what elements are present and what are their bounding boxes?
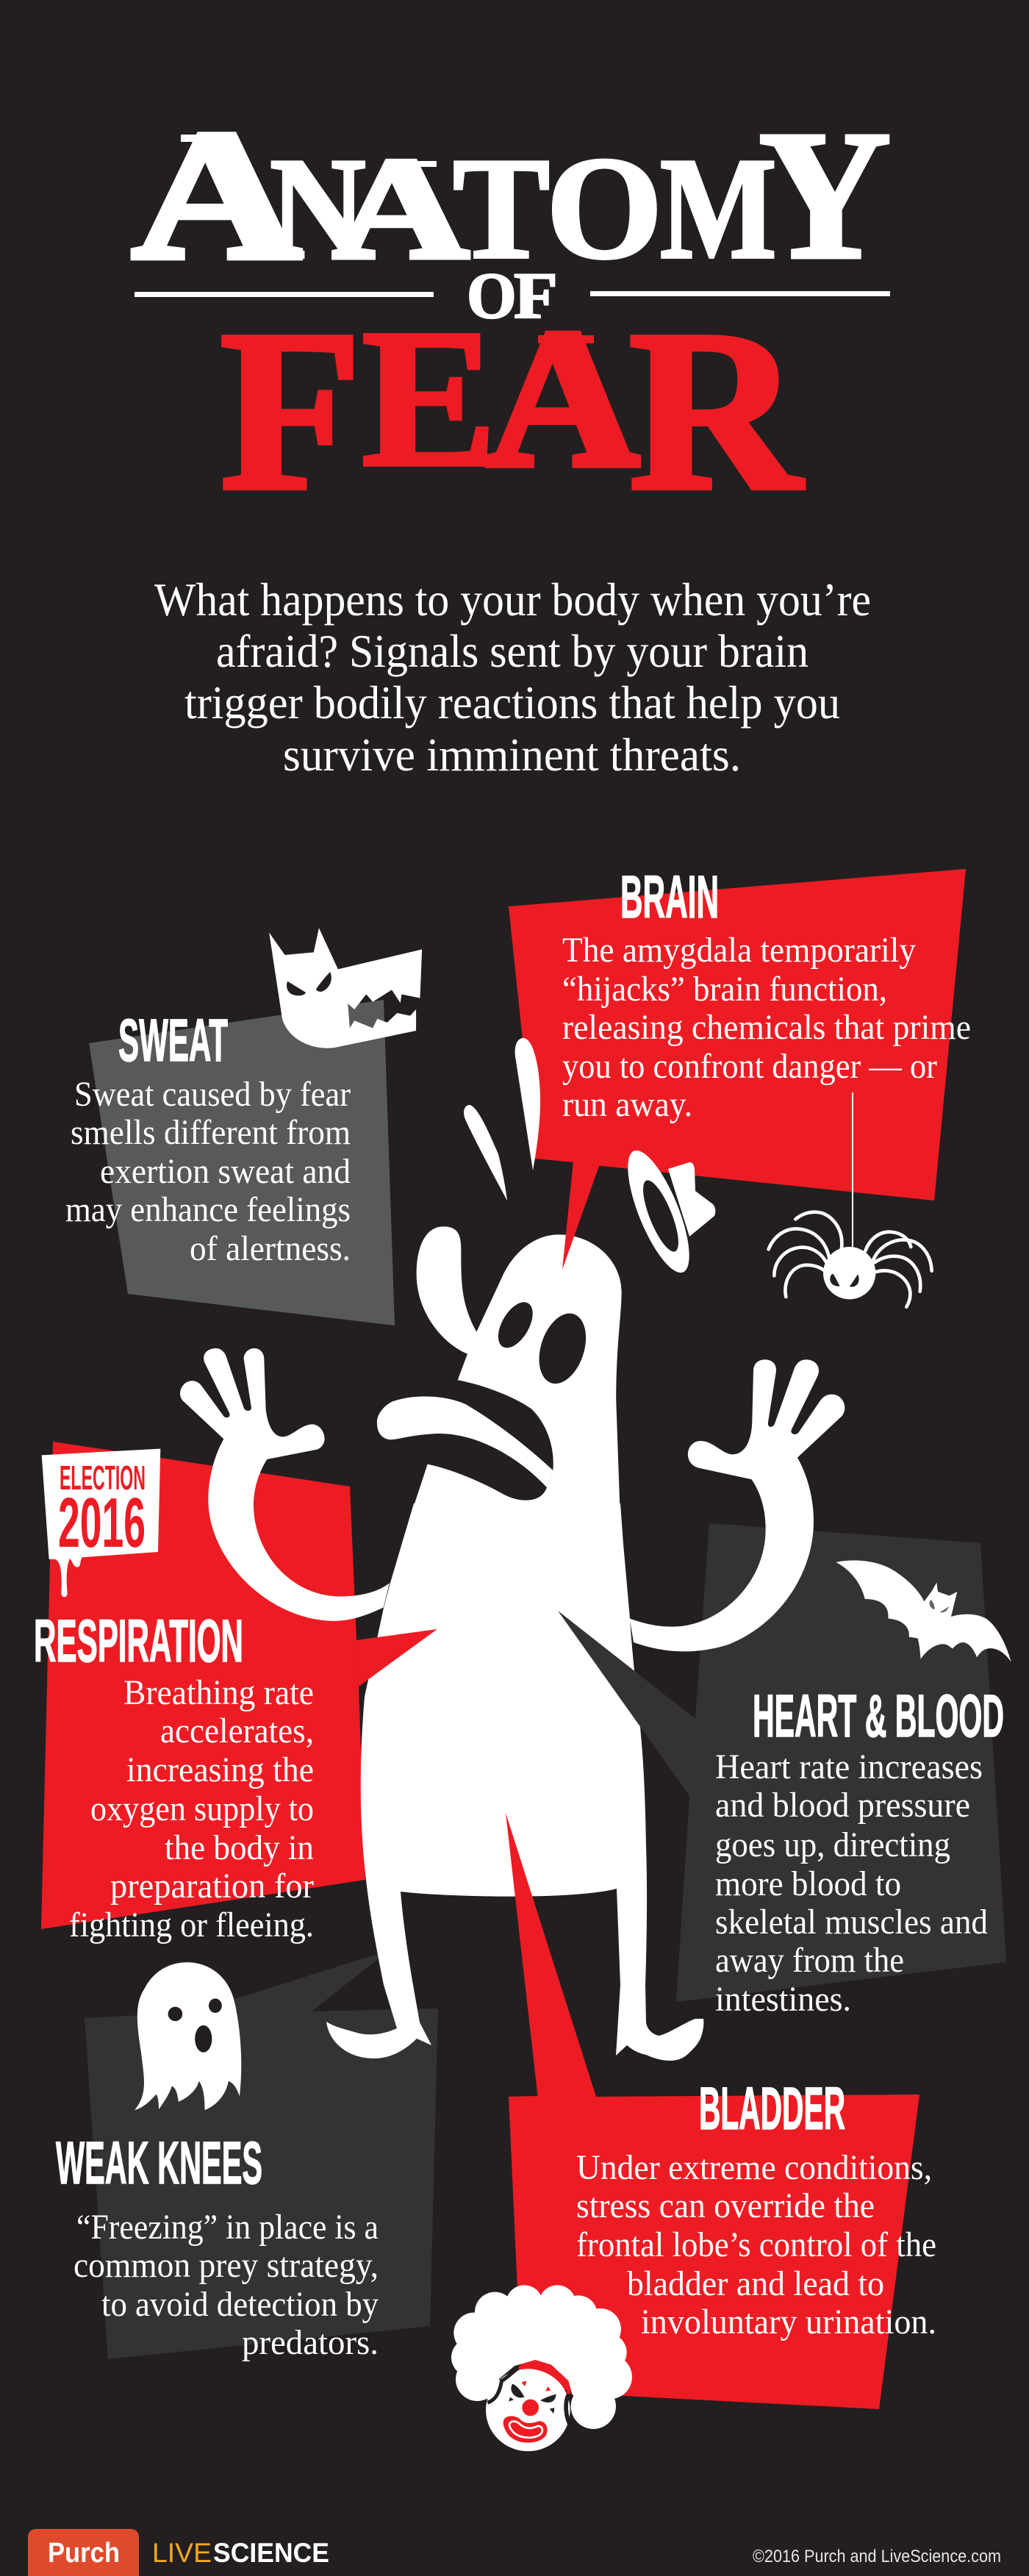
text: brain: you to confront danger — or [562, 1047, 937, 1086]
text: weak knees: common prey strategy, [74, 2246, 379, 2285]
text: heart and blood: and blood pressure [715, 1786, 970, 1825]
pointer: heart and blood [558, 1611, 695, 1796]
title line: Fear: R [628, 283, 804, 539]
text: heart and blood: Heart rate increases [715, 1747, 983, 1786]
text: weak knees: to avoid detection by [101, 2285, 379, 2324]
panel: heart and blood [676, 1523, 1006, 2019]
title [132, 93, 892, 539]
text: weak knees: predators. [242, 2323, 379, 2362]
title line: of with rules: O [467, 260, 517, 332]
heading: sweat: SWEAT [118, 1007, 228, 1074]
text: bladder: Under extreme conditions, [576, 2148, 932, 2187]
logo: LiveScience: SCIENCE [213, 2538, 329, 2568]
text: sweat: Sweat caused by fear [74, 1075, 351, 1114]
text: respiration: the body in [165, 1828, 314, 1867]
body and legs [326, 1503, 703, 2061]
intro text: trigger bodily reactions that help you [184, 677, 840, 729]
text: bladder: involuntary urination. [641, 2303, 936, 2341]
text: respiration: accelerates, [160, 1711, 314, 1750]
badge: election 2016: 2016 [58, 1484, 146, 1562]
title line: Fear: A [487, 289, 639, 508]
text: bladder: frontal lobe’s control of the [576, 2225, 936, 2264]
copyright: ©2016 Purch and LiveScience.com [753, 2547, 1001, 2566]
icon: spider [769, 1092, 932, 1307]
figure: frightened character [180, 1226, 845, 2061]
intro text [154, 574, 871, 781]
text: sweat: exertion sweat and [100, 1152, 351, 1191]
text: weak knees: “Freezing” in place is a [76, 2208, 379, 2247]
text: respiration [69, 1673, 314, 1944]
pointer: respiration [356, 1629, 437, 1686]
text: bladder: stress can override the [576, 2186, 875, 2225]
pointer: brain [562, 1154, 602, 1270]
panel: sweat [65, 1000, 395, 1325]
text: heart and blood [715, 1747, 988, 2019]
heading: weak knees: WEAK KNEES [56, 2130, 262, 2197]
text: brain: “hijacks” brain function, [562, 970, 887, 1009]
logo: Purch: Purch [48, 2538, 120, 2569]
logo: LiveScience [152, 2538, 329, 2568]
title line: Fear: F [220, 283, 362, 539]
title line: Anatomy: T [453, 128, 550, 289]
icon: bat [836, 1560, 1011, 1662]
text: bladder [576, 2148, 936, 2341]
text: heart and blood: more blood to [715, 1864, 901, 1903]
panel: bladder: BLADDER [699, 2075, 845, 2142]
title line: Fear [220, 283, 804, 539]
icon: wolf [269, 928, 422, 1048]
title line: Anatomy: N [270, 129, 366, 290]
heading: brain: BRAIN [620, 864, 719, 931]
panel: bladder [509, 2075, 936, 2409]
text: sweat: of alertness. [190, 1229, 351, 1268]
pointer: bladder [506, 1813, 597, 2099]
title line: Anatomy: A [132, 93, 301, 298]
text: respiration: Breathing rate [123, 1673, 314, 1712]
logo: LiveScience: LIVE [152, 2538, 212, 2568]
title line: Fear: E [362, 288, 497, 507]
logo: Purch [28, 2529, 139, 2576]
heading: respiration: RESPIRATION [34, 1608, 243, 1675]
title line: of with rules [135, 260, 890, 332]
left arm and hand [180, 1348, 390, 1621]
text: respiration: oxygen supply to [90, 1789, 314, 1828]
head [377, 1226, 622, 1506]
text: weak knees [74, 2208, 379, 2362]
text: sweat [65, 1075, 351, 1268]
title line: Anatomy: A [333, 127, 469, 289]
text: heart and blood: skeletal muscles and [715, 1903, 988, 1942]
panel: weak knees [56, 1950, 438, 2362]
text: sweat: may enhance feelings [65, 1190, 351, 1229]
icon: ghost [135, 1962, 241, 2110]
text: sweat: smells different from [71, 1113, 351, 1152]
icon: clown [451, 2285, 632, 2451]
text: brain: releasing chemicals that prime [562, 1008, 971, 1047]
title line: Anatomy: O [546, 126, 663, 290]
title line: of with rules: F [514, 260, 558, 332]
intro text: What happens to your body when you’re [154, 574, 871, 626]
intro text: afraid? Signals sent by your brain [216, 626, 808, 677]
text: heart and blood: intestines. [715, 1980, 851, 2019]
badge: election 2016 [42, 1449, 160, 1597]
icon: sweat drops [464, 1038, 540, 1201]
intro text: survive imminent threats. [283, 729, 741, 781]
panel: brain [509, 864, 971, 1201]
panel: respiration [34, 1442, 365, 1944]
text: respiration: increasing the [126, 1750, 314, 1789]
icon: flying hat [616, 1143, 715, 1280]
text: bladder: bladder and lead to [627, 2264, 884, 2303]
text: brain: The amygdala temporarily [562, 931, 916, 970]
badge: election 2016: ELECTION [60, 1459, 146, 1497]
right arm and hand [630, 1359, 845, 1651]
title line: Anatomy: M [660, 127, 777, 289]
text: respiration: preparation for [110, 1867, 314, 1906]
title line: Anatomy: Y [759, 93, 892, 298]
text: heart and blood: away from the [715, 1941, 904, 1980]
text: brain: run away. [562, 1085, 692, 1124]
text: heart and blood: goes up, directing [715, 1825, 950, 1864]
text: respiration: fighting or fleeing. [69, 1906, 314, 1944]
text: brain [562, 931, 971, 1124]
title line: Anatomy [132, 93, 892, 298]
